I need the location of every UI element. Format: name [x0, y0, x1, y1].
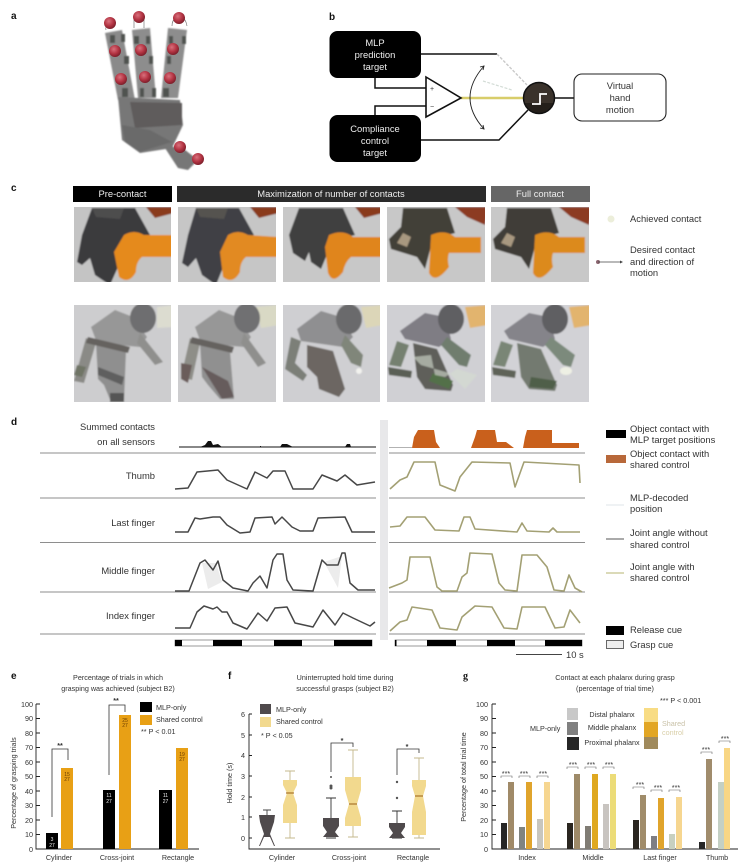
connectors — [375, 54, 574, 140]
bars: cylinder: 27 — [49, 843, 55, 849]
traces left: MLP-decoded shading — [202, 556, 342, 589]
photo row 1, frame 2 — [178, 207, 276, 282]
y tick labels — [21, 700, 33, 854]
x labels — [46, 853, 194, 862]
legend: desired contact and direction of motion — [596, 244, 696, 278]
legend: object contact MLP: MLP target positions — [630, 434, 716, 445]
bars: cross-joint: 11 — [106, 793, 112, 799]
y tick labels: 90 — [480, 714, 488, 723]
chart title — [296, 673, 394, 693]
box: MLP prediction target: MLP — [365, 37, 385, 48]
legend: phalanges: Proximal phalanx — [584, 738, 640, 747]
icon: step function switch — [524, 82, 554, 114]
panel g: bar chart phalanx contact — [459, 671, 738, 862]
significance stars: *** — [605, 760, 613, 769]
y tick labels: 90 — [25, 714, 33, 723]
x labels: Cross-joint — [332, 853, 366, 862]
photo row 2, frame 5 — [491, 305, 589, 402]
legend: phalanges: *** P < 0.001 — [660, 696, 701, 705]
legend: joint angle without shared control: Joint angle without — [630, 527, 708, 538]
chart title: successful grasps (subject B2) — [296, 684, 394, 693]
legend: * P < 0.05 — [261, 731, 293, 740]
chart title: grasping was achieved (subject B2) — [61, 684, 175, 693]
legend — [140, 702, 203, 736]
scale bar: 10 s: 10 s — [566, 649, 584, 660]
label d: d — [11, 417, 17, 428]
bars: rectangle — [159, 748, 188, 849]
x labels: Thumb — [706, 853, 728, 862]
cue bar right — [395, 640, 582, 646]
legend: release cue — [606, 624, 682, 635]
significance stars: *** — [702, 745, 710, 754]
legend: object contact shared: shared control — [630, 459, 689, 470]
x labels — [269, 853, 429, 862]
contacts left: black — [179, 441, 376, 447]
photo row 1, frame 5 — [491, 207, 589, 282]
y tick labels: 50 — [25, 772, 33, 781]
bars: middle — [567, 774, 616, 849]
legend: object contact MLP — [606, 423, 716, 445]
y tick labels: 50 — [480, 772, 488, 781]
significance stars: *** — [672, 783, 680, 792]
label c: c — [11, 183, 17, 194]
comparator triangle: + — [430, 86, 434, 93]
bars: cross-joint: 27 — [106, 799, 112, 805]
significance stars: *** — [502, 769, 510, 778]
legend: release cue: Release cue — [630, 624, 682, 635]
x labels: Index — [518, 853, 536, 862]
box: cylinder shared — [283, 771, 297, 838]
box: MLP prediction target — [330, 31, 421, 78]
y tick labels: 70 — [25, 743, 33, 752]
photo row 2, frame 3 — [283, 305, 380, 402]
legend: Shared control — [156, 715, 203, 724]
y tick labels: 10 — [480, 830, 488, 839]
icon: virtual hand — [104, 11, 204, 170]
box: compliance control target: target — [363, 147, 387, 158]
legend: desired contact and direction of motion: Desired contact — [630, 244, 696, 255]
x labels: Cross-joint — [100, 853, 134, 862]
panel d: finger traces — [11, 417, 716, 660]
photo row 2, frame 1 — [74, 305, 171, 402]
y tick labels: 20 — [25, 816, 33, 825]
y tick labels: 40 — [480, 787, 488, 796]
legend: MLP-only — [156, 703, 187, 712]
legend: ** P < 0.01 — [141, 727, 175, 736]
active yellow line — [461, 97, 524, 99]
row labels: Index finger — [106, 610, 155, 621]
header: Full contact: Full contact — [516, 188, 564, 199]
y axis label: Percentage of grasping trials — [9, 737, 18, 829]
legend: joint angle with shared control: Joint angle with — [630, 561, 695, 572]
panel f: box plot hold time — [225, 671, 440, 862]
legend: object contact shared: Object contact with — [630, 448, 709, 459]
significance brackets — [331, 736, 419, 775]
y tick labels: 60 — [25, 758, 33, 767]
scale bar: 10 s — [516, 649, 584, 660]
row labels: Thumb — [126, 470, 155, 481]
y tick labels: 1 — [241, 813, 245, 822]
bars: cylinder: 3 — [51, 837, 54, 843]
photo row 1, frame 3 — [283, 207, 380, 282]
box: compliance control target: control — [361, 135, 389, 146]
y tick labels: 6 — [241, 710, 245, 719]
significance stars — [501, 734, 730, 792]
chart title: Contact at each phalanx during grasp — [555, 673, 675, 682]
chart title: (percentage of trial time) — [576, 684, 654, 693]
chart title: Uninterrupted hold time during — [297, 673, 393, 682]
y tick labels: 4 — [241, 751, 245, 760]
bars: cross-joint: 25 — [122, 718, 128, 724]
bars: rectangle: 27 — [163, 799, 168, 805]
legend: joint angle with shared control: shared control — [630, 572, 689, 583]
axes and ticks — [492, 704, 738, 849]
legend: phalanges: Distal phalanx — [589, 710, 635, 719]
traces right: joint angle with shared control — [389, 462, 582, 631]
significance brackets: ** — [57, 741, 63, 750]
y tick labels: 30 — [480, 801, 488, 810]
label a: a — [11, 11, 17, 22]
y tick labels: 40 — [25, 787, 33, 796]
contacts right: orange — [389, 430, 579, 448]
bars: cylinder — [46, 768, 73, 849]
legend: MLP-decoded position — [606, 492, 688, 514]
photo row 1, frame 4 — [387, 207, 485, 282]
box: MLP prediction target: target — [363, 61, 387, 72]
traces left: joint angle without shared control — [175, 470, 375, 629]
axes and ticks — [36, 704, 199, 849]
bars: rectangle: 11 — [163, 793, 168, 799]
bars: rectangle: 27 — [179, 757, 185, 763]
y tick labels: 0 — [484, 845, 488, 854]
comparator triangle: − — [430, 104, 434, 111]
legend: phalanges: Middle phalanx — [588, 723, 637, 732]
y tick labels — [476, 700, 488, 854]
legend: phalanges: MLP-only — [530, 724, 561, 733]
bars: cross-joint: 27 — [122, 723, 128, 729]
bars: rectangle: 19 — [179, 752, 185, 758]
bars: last finger — [633, 795, 682, 849]
box: virtual hand motion: motion — [606, 104, 634, 115]
row labels — [80, 421, 155, 621]
y tick labels: 10 — [25, 830, 33, 839]
y tick labels: 0 — [241, 834, 245, 843]
chart title — [555, 673, 675, 693]
x labels: Middle — [582, 853, 604, 862]
header: Full contact — [491, 186, 590, 202]
box: cylinder MLP — [259, 810, 275, 846]
significance brackets: * — [406, 742, 409, 751]
box: virtual hand motion: hand — [610, 92, 630, 103]
legend: joint angle without shared control: shared control — [630, 539, 689, 550]
comparator triangle — [426, 77, 461, 117]
bars: thumb — [699, 748, 730, 849]
bars: cross-joint — [103, 715, 131, 849]
header: Pre-contact — [73, 186, 172, 202]
significance brackets: ** — [113, 696, 119, 705]
y tick labels — [241, 710, 245, 843]
y tick labels: 80 — [480, 729, 488, 738]
photo row 2, frame 4 — [387, 305, 485, 402]
y tick labels: 100 — [476, 700, 488, 709]
significance stars: *** — [636, 780, 644, 789]
y tick labels: 2 — [241, 793, 245, 802]
legend: object contact MLP: Object contact with — [630, 423, 709, 434]
significance stars: *** — [721, 734, 729, 743]
row labels: Middle finger — [101, 565, 155, 576]
box: MLP prediction target: prediction — [355, 49, 395, 60]
legend: MLP-decoded position: MLP-decoded — [630, 492, 688, 503]
box: compliance control target: Compliance — [350, 123, 400, 134]
significance brackets — [52, 696, 125, 817]
label f: f — [228, 671, 232, 682]
significance stars: *** — [520, 769, 528, 778]
significance stars: *** — [654, 783, 662, 792]
significance stars: *** — [587, 760, 595, 769]
photo row 2, frame 2 — [178, 305, 276, 402]
x labels: Cylinder — [269, 853, 296, 862]
photo row 1, frame 1 — [74, 207, 171, 282]
legend: desired contact and direction of motion: and direction of — [630, 256, 695, 267]
legend: Shared control — [276, 717, 323, 726]
significance stars: *** — [539, 769, 547, 778]
box: virtual hand motion — [574, 74, 666, 121]
y tick labels: 70 — [480, 743, 488, 752]
x labels: Last finger — [643, 853, 677, 862]
box: cross-joint shared — [345, 750, 361, 837]
label b: b — [329, 12, 335, 23]
y axis label: Percentage of total trial time — [459, 732, 468, 822]
panel a: robotic hand — [11, 11, 204, 170]
row labels: Summed contacts — [80, 421, 155, 432]
y tick labels: 3 — [241, 772, 245, 781]
y tick labels: 5 — [241, 731, 245, 740]
legend: phalanges — [530, 696, 701, 750]
header: Maximization of number of contacts — [177, 186, 486, 202]
row labels: on all sensors — [97, 436, 155, 447]
y tick labels: 100 — [21, 700, 33, 709]
legend: grasp cue: Grasp cue — [630, 639, 673, 650]
y tick labels: 20 — [480, 816, 488, 825]
label e: e — [11, 671, 17, 682]
y tick labels: 80 — [25, 729, 33, 738]
box: compliance control target — [330, 115, 421, 162]
bars: index — [501, 782, 550, 849]
legend: joint angle with shared control — [606, 561, 695, 583]
legend: grasp cue — [606, 639, 673, 650]
panel c: contact sequence — [11, 183, 702, 405]
box: virtual hand motion: Virtual — [607, 80, 633, 91]
x labels: Cylinder — [46, 853, 73, 862]
axes and ticks — [249, 714, 440, 849]
bars: cylinder: 15 — [64, 772, 70, 778]
legend: MLP-decoded position: position — [630, 503, 662, 514]
legend: object contact shared — [606, 448, 709, 470]
panel e: bar chart grasping success — [9, 671, 203, 862]
row labels: Last finger — [111, 517, 155, 528]
header: Maximization of number of contacts: Maximization of number of contacts — [257, 188, 405, 199]
box: rectangle MLP — [389, 781, 405, 838]
header: Pre-contact: Pre-contact — [99, 188, 147, 199]
legend: joint angle without shared control — [606, 527, 708, 550]
y tick labels: 60 — [480, 758, 488, 767]
significance stars: *** — [569, 760, 577, 769]
switch: dashed inactive paths — [483, 54, 527, 90]
x labels — [518, 853, 728, 862]
legend: phalanges: Shared — [662, 719, 685, 728]
chart title: Percentage of trials in which — [73, 673, 163, 682]
legend: desired contact and direction of motion: motion — [630, 267, 658, 278]
bars: cylinder: 27 — [64, 777, 70, 783]
track lines — [40, 453, 585, 634]
chart title — [61, 673, 175, 693]
label g: g — [463, 671, 468, 682]
legend: phalanges: control — [662, 728, 684, 737]
significance brackets: * — [341, 736, 344, 745]
y axis label: Hold time (s) — [225, 763, 234, 803]
legend — [260, 704, 323, 740]
cue bar left — [175, 640, 372, 646]
y tick labels: 0 — [29, 845, 33, 854]
box: rectangle shared — [412, 758, 426, 838]
grey separator band — [380, 420, 388, 640]
arc arrow — [470, 66, 484, 129]
panel b: control diagram — [329, 12, 666, 162]
legend: achieved contact: Achieved contact — [630, 213, 702, 224]
legend: MLP-only — [276, 705, 307, 714]
x labels: Rectangle — [397, 853, 429, 862]
box: cross-joint MLP — [323, 776, 339, 838]
y tick labels: 30 — [25, 801, 33, 810]
x labels: Rectangle — [162, 853, 194, 862]
